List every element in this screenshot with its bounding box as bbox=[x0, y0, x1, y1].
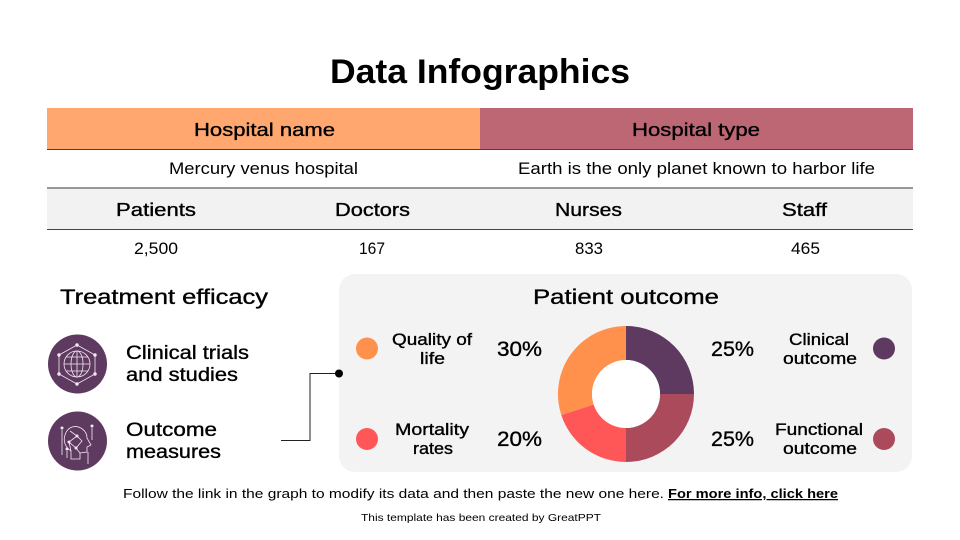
footer note bbox=[123, 487, 838, 501]
panel: patient outcome bbox=[339, 274, 912, 472]
legend: quality of life: life bbox=[420, 350, 445, 368]
staffing header band: Nurses bbox=[555, 199, 622, 220]
credit line: This template has been created by GreatPPT bbox=[361, 512, 602, 524]
header cell: hospital type bbox=[480, 108, 913, 149]
text: outcome measures: Outcome bbox=[126, 420, 217, 441]
legend: mortality rates: Mortality bbox=[395, 421, 470, 439]
legend: quality of life bbox=[356, 331, 542, 368]
legend: functional outcome bbox=[711, 421, 895, 458]
heading: treatment efficacy: Treatment efficacy bbox=[60, 286, 269, 309]
text: outcome measures bbox=[126, 420, 221, 463]
staffing values: 167 bbox=[359, 240, 385, 258]
legend: mortality rates: rates bbox=[413, 440, 453, 458]
text: clinical trials and studies: and studies bbox=[126, 365, 238, 386]
staffing header band: Doctors bbox=[335, 199, 410, 220]
legend: clinical outcome: outcome bbox=[783, 350, 857, 368]
header cell: hospital name bbox=[47, 108, 480, 149]
text: outcome measures: measures bbox=[126, 442, 221, 463]
legend: mortality rates bbox=[356, 421, 542, 458]
legend: quality of life: Quality of bbox=[392, 331, 472, 349]
header cell: hospital name: Hospital name bbox=[194, 119, 335, 140]
hospital type value: Earth is the only planet known to harbor life bbox=[518, 160, 875, 178]
header cell: hospital type: Hospital type bbox=[632, 119, 760, 140]
text: clinical trials and studies bbox=[126, 343, 249, 386]
icon: globe network bbox=[48, 334, 107, 394]
legend: functional outcome: 25% bbox=[711, 428, 754, 451]
legend: functional outcome: outcome bbox=[783, 440, 857, 458]
connector arrow bbox=[281, 370, 343, 440]
footer note: For more info, click here bbox=[668, 487, 838, 501]
legend: clinical outcome: Clinical bbox=[789, 331, 849, 349]
donut chart bbox=[558, 326, 694, 462]
icon: AI head bbox=[48, 412, 107, 470]
text: clinical trials and studies: Clinical trials bbox=[126, 343, 249, 364]
legend: quality of life: 30% bbox=[497, 338, 542, 361]
legend: functional outcome: Functional bbox=[775, 421, 863, 439]
legend: clinical outcome bbox=[711, 331, 895, 368]
heading: patient outcome: Patient outcome bbox=[533, 286, 719, 309]
staffing values: 2,500 bbox=[134, 240, 178, 258]
staffing header band: Staff bbox=[782, 199, 828, 220]
staffing values: 833 bbox=[575, 240, 603, 258]
staffing header band: Patients bbox=[116, 199, 196, 220]
legend: clinical outcome: 25% bbox=[711, 338, 754, 361]
hospital name value: Mercury venus hospital bbox=[169, 160, 358, 178]
staffing values: 465 bbox=[791, 240, 820, 258]
title: Data Infographics bbox=[330, 53, 630, 91]
staffing values bbox=[134, 240, 820, 258]
staffing header band bbox=[47, 188, 913, 229]
footer note: Follow the link in the graph to modify its data and then paste the new one here. bbox=[123, 487, 664, 501]
legend: mortality rates: 20% bbox=[497, 428, 542, 451]
